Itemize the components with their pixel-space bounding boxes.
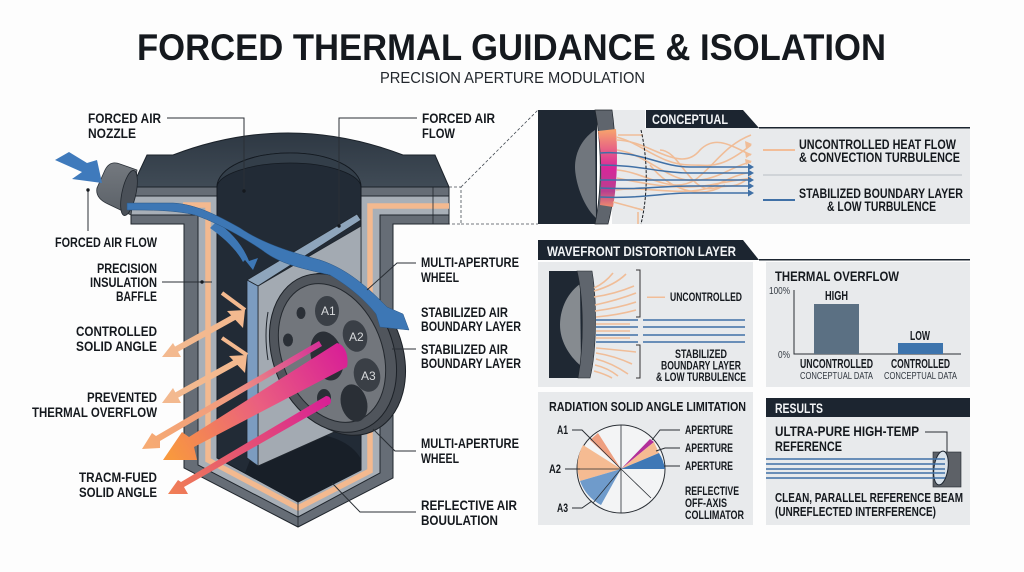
legend: stabilized: STABILIZED BOUNDARY LAYER: [799, 186, 963, 201]
lens detail: [538, 110, 617, 224]
pie labels: APERTURE: [685, 423, 733, 437]
label: stabilized: BOUNDARY LAYER: [661, 358, 741, 372]
label: stabilized air boundary layer 2: [421, 342, 521, 371]
panel background: [766, 417, 970, 525]
heading: RADIATION SOLID ANGLE LIMITATION: [549, 399, 746, 414]
header: results: RESULTS: [775, 401, 823, 416]
panel background: [766, 262, 970, 387]
bar chart: 100%: [769, 285, 790, 297]
label: forced air flow top: [422, 111, 495, 141]
label: stabilized: [656, 347, 746, 384]
bar chart: HIGH: [825, 289, 848, 303]
label: multi-aperture wheel: MULTI-APERTURE: [421, 255, 519, 270]
aperture wheel: [247, 253, 429, 455]
right labels: [421, 111, 521, 528]
pie labels: [549, 423, 744, 522]
label: reflective air boulation: [421, 498, 517, 528]
caption: [775, 490, 963, 519]
label: multi-aperture wheel 2: [421, 436, 519, 466]
subtitle: PRECISION APERTURE MODULATION: [380, 70, 645, 87]
icon: nozzle: [97, 163, 141, 217]
arrow: inlet air: [55, 152, 102, 183]
collimator block: [932, 450, 961, 487]
pie labels: APERTURE: [685, 441, 733, 455]
label: prevented thermal overflow: [32, 390, 157, 420]
arrow: prevented thermal overflow: [162, 338, 247, 403]
panel background: [612, 110, 970, 224]
label: stabilized air boundary layer 2: BOUNDARY LAYER: [421, 356, 521, 371]
label: forced air flow top: FORCED AIR: [422, 111, 495, 126]
arrow: air branch: [210, 222, 258, 270]
panel: thermal overflow: [766, 262, 970, 387]
label: uncontrolled: UNCONTROLLED: [670, 290, 742, 304]
legend: uncontrolled: & CONVECTION TURBULENCE: [799, 150, 960, 165]
label: stabilized air boundary layer 2: STABILIZED AIR: [421, 342, 508, 357]
bar chart: LOW: [910, 329, 930, 343]
bar chart: UNCONTROLLED: [800, 357, 873, 371]
header: conceptual: CONCEPTUAL: [652, 112, 728, 127]
pie labels: OFF-AXIS: [685, 496, 727, 510]
pie labels: A2: [549, 462, 561, 476]
pie leader lines: [565, 430, 680, 508]
label: forced air nozzle: [88, 111, 161, 141]
beam: lower thin: [168, 396, 331, 494]
label: stabilized air boundary layer: STABILIZED AIR: [421, 305, 508, 320]
open apertures: [283, 307, 371, 425]
aperture labels: A3: [361, 369, 376, 383]
uncontrolled curves: [594, 273, 636, 378]
lens detail: [549, 271, 596, 378]
label: tracm-fued solid angle: [79, 470, 157, 500]
label: stabilized air boundary layer: [421, 305, 521, 334]
label: tracm-fued solid angle: SOLID ANGLE: [79, 485, 157, 500]
legend divider: [763, 174, 962, 176]
bar chart: CONCEPTUAL DATA: [884, 370, 957, 382]
arrow: controlled solid angle: [162, 293, 245, 357]
header: wavefront: WAVEFRONT DISTORTION LAYER: [547, 243, 736, 259]
aperture A2: [339, 317, 371, 355]
pie labels: A3: [557, 501, 568, 515]
header rule: [759, 259, 970, 260]
label: forced air flow top: FLOW: [422, 126, 455, 141]
label: reflective air boulation: BOUULATION: [421, 513, 498, 528]
header: conceptual: [646, 110, 759, 128]
zoom callout dashed lines: [449, 110, 538, 224]
stabilized flow lines: [600, 153, 754, 197]
label: stabilized air boundary layer: BOUNDARY LAYER: [421, 319, 521, 334]
label: prevented thermal overflow: PREVENTED: [87, 390, 157, 405]
label: controlled solid angle: [76, 324, 157, 354]
legend: stabilized: [763, 186, 963, 214]
panel: wavefront distortion layer: [538, 240, 970, 387]
panel background: [538, 392, 753, 525]
pie chart: [577, 425, 665, 513]
label: uncontrolled: [647, 290, 742, 304]
label: prevented thermal overflow: THERMAL OVERFLOW: [32, 405, 157, 420]
bar chart: CONTROLLED: [891, 357, 950, 371]
top flange: [132, 133, 449, 187]
turbulent heat flow lines: [613, 135, 752, 224]
left labels: [32, 111, 161, 500]
label: forced air flow: FORCED AIR FLOW: [55, 235, 157, 250]
title: FORCED THERMAL GUIDANCE & ISOLATION: [137, 27, 886, 68]
leader: [925, 432, 947, 452]
housing walls: [131, 187, 449, 527]
arrow: forced air flow: [127, 203, 409, 330]
label: tracm-fued solid angle: TRACM-FUED: [79, 470, 157, 485]
bar chart: 0%: [778, 349, 790, 361]
label: stabilized: & LOW TURBULENCE: [656, 370, 746, 384]
label: precision insulation baffle: PRECISION: [97, 261, 157, 276]
bar: controlled: [898, 343, 943, 354]
heading: ultra-pure reference: REFERENCE: [775, 438, 842, 454]
legend: uncontrolled: [763, 137, 960, 165]
bar chart: [769, 285, 961, 382]
beam: upper thin: [142, 341, 322, 449]
bracket: [636, 270, 640, 378]
aperture labels: A2: [349, 330, 364, 344]
panel: radiation solid angle limitation: [538, 392, 753, 525]
stabilized lines: [596, 320, 745, 342]
pie labels: COLLIMATOR: [685, 508, 744, 522]
legend: stabilized: & LOW TURBULENCE: [827, 199, 936, 214]
label: multi-aperture wheel 2: WHEEL: [421, 451, 459, 466]
baffle plate: [247, 214, 361, 466]
label: multi-aperture wheel 2: MULTI-APERTURE: [421, 436, 519, 451]
label: controlled solid angle: SOLID ANGLE: [76, 339, 157, 354]
header: results: [766, 398, 970, 417]
pie labels: A1: [557, 423, 568, 437]
aperture A1: [315, 296, 339, 326]
aperture labels: A1: [321, 304, 336, 318]
label: multi-aperture wheel: WHEEL: [421, 270, 459, 285]
heading: ultra-pure reference: ULTRA-PURE HIGH-TEMP: [775, 423, 919, 439]
label: precision insulation baffle: [90, 261, 157, 304]
caption: (UNREFLECTED INTERFERENCE): [775, 504, 936, 519]
pie labels: REFLECTIVE: [685, 484, 739, 498]
beam: main: [163, 343, 348, 460]
cavity rim: [217, 153, 361, 187]
reference beam: [766, 459, 945, 478]
inner cavity: [217, 153, 361, 502]
cutaway housing diagram: [55, 133, 449, 527]
label: multi-aperture wheel: [421, 255, 519, 285]
legend: uncontrolled: UNCONTROLLED HEAT FLOW: [799, 137, 956, 152]
heading: ultra-pure reference: [775, 423, 919, 454]
aperture A3: [350, 355, 384, 395]
panel background: [538, 262, 753, 387]
panel: conceptual: [538, 110, 970, 224]
pie labels: APERTURE: [685, 459, 733, 473]
label: reflective air boulation: REFLECTIVE AIR: [421, 498, 517, 513]
label: precision insulation baffle: BAFFLE: [116, 289, 157, 304]
label: forced air nozzle: NOZZLE: [88, 126, 136, 141]
label: precision insulation baffle: INSULATION: [90, 275, 157, 290]
label: stabilized: STABILIZED: [675, 347, 727, 361]
header rule: [759, 127, 970, 128]
boundary dashed curve: [641, 130, 646, 224]
label: controlled solid angle: CONTROLLED: [76, 324, 157, 339]
panel: results: [766, 398, 970, 525]
heading: THERMAL OVERFLOW: [775, 268, 900, 284]
label: forced air nozzle: FORCED AIR: [88, 111, 161, 126]
bar chart: CONCEPTUAL DATA: [800, 370, 873, 382]
cavity floor: [245, 433, 361, 502]
caption: CLEAN, PARALLEL REFERENCE BEAM: [775, 490, 963, 505]
aperture labels: [321, 304, 376, 383]
bar: uncontrolled: [814, 304, 859, 354]
callout leaders on diagram: [86, 118, 417, 512]
